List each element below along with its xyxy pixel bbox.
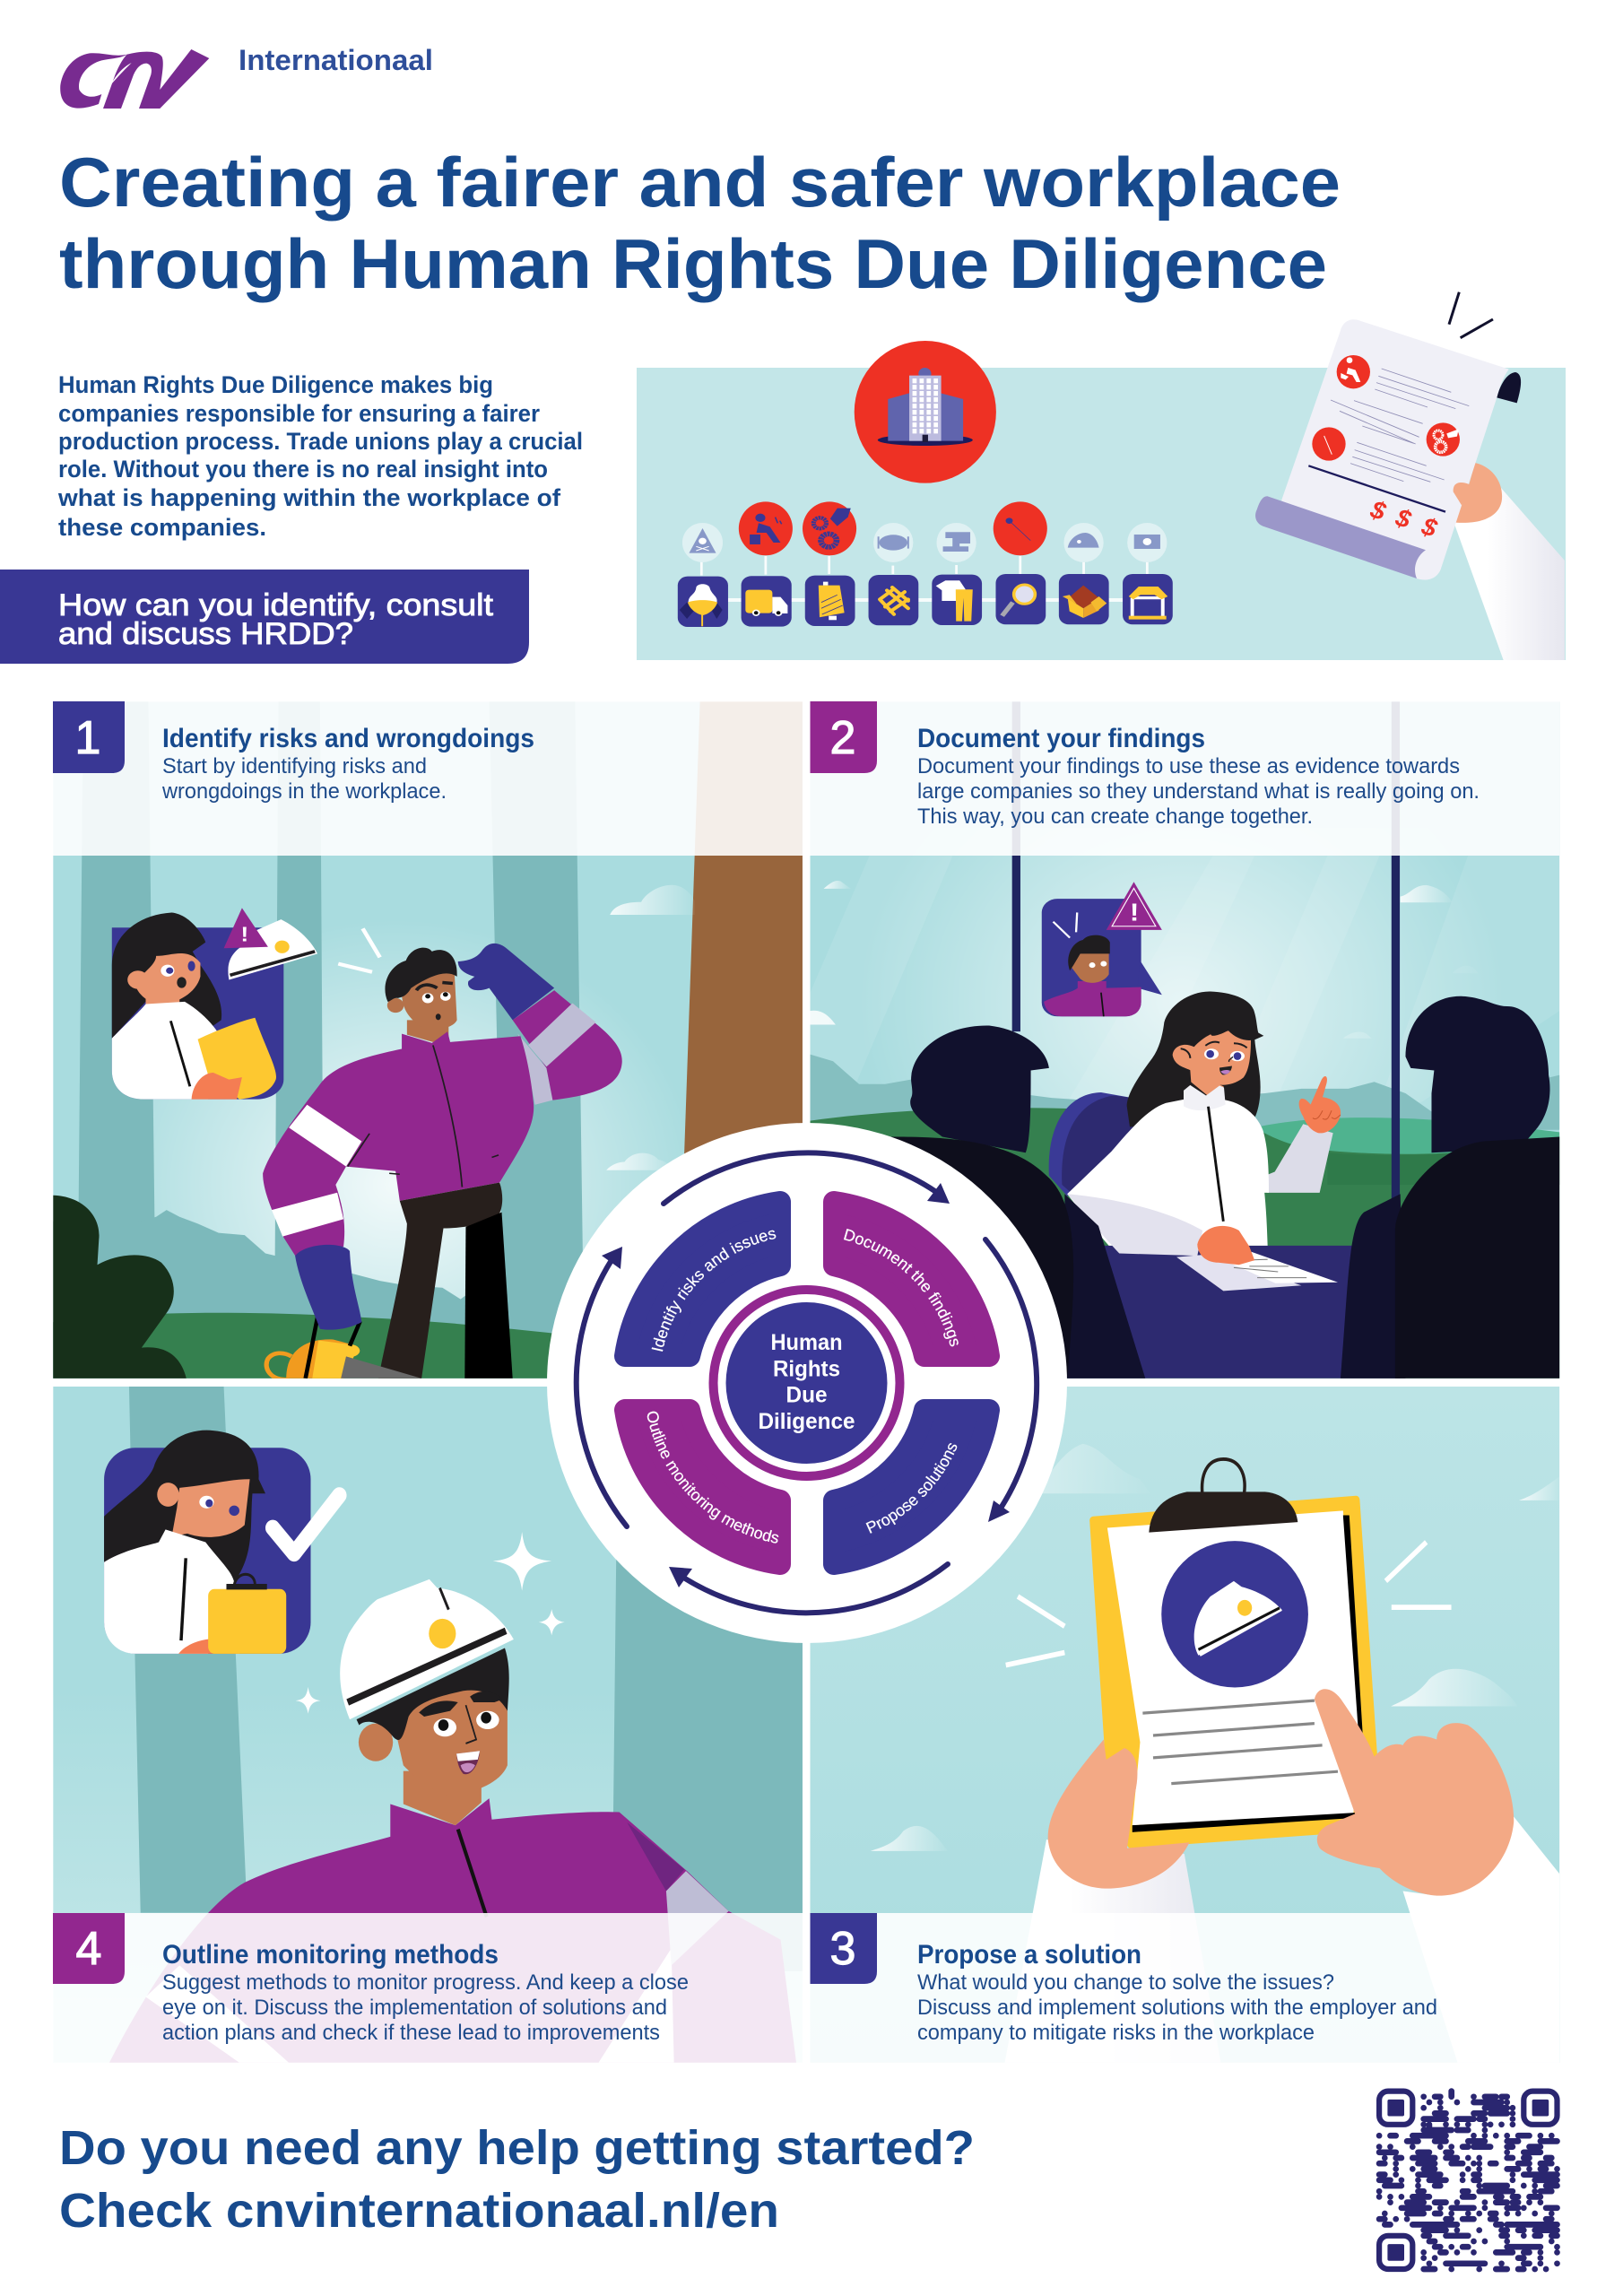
icon: cotton <box>680 584 723 626</box>
number badge 4 <box>53 1913 125 1984</box>
icon: red building circle <box>855 341 996 483</box>
logo: CNV Internationaal: Internationaal <box>239 44 433 76</box>
number badge 1 <box>53 701 125 773</box>
character: woman speaking <box>1067 992 1341 1291</box>
intro text: role. Without you there is no real insight into <box>58 456 548 483</box>
number badge 3 <box>811 1913 877 1984</box>
header overlay 4 <box>53 1913 803 2063</box>
heading: step 4: action plans and check if these lead to improvements <box>162 2021 660 2045</box>
header overlay 3 <box>811 1913 1559 2063</box>
icon: warning triangle <box>224 908 268 948</box>
segment: document <box>823 1191 1000 1367</box>
centre hub: Due <box>785 1383 828 1408</box>
segment: outline: Outline monitoring methods <box>647 1412 778 1544</box>
character: worker smiling <box>109 1579 796 2063</box>
inset: woman with clipboard <box>104 1431 339 1654</box>
rays <box>1006 1542 1452 1665</box>
centre hub: Rights <box>773 1356 840 1381</box>
speech bubble: worker <box>1042 882 1162 1016</box>
segment: outline <box>614 1399 791 1575</box>
heading: step 1: Identify risks and wrongdoings <box>162 724 534 753</box>
icon: supply chain squares <box>678 574 1173 627</box>
cloud <box>824 881 851 889</box>
sleeves <box>1005 1839 1194 2063</box>
heading: step 3 <box>917 1940 1437 2045</box>
QR code <box>1379 2092 1557 2269</box>
footer call to action: Check cnvinternationaal.nl/en <box>59 2184 779 2238</box>
icon: clothing <box>936 580 973 622</box>
heading: step 3: Propose a solution <box>917 1940 1141 1970</box>
chair <box>1049 1092 1128 1196</box>
icon: warning triangle: ! <box>240 923 248 946</box>
heading: step 3: company to mitigate risks in the workplace <box>917 2021 1315 2045</box>
centre hub <box>714 1290 900 1476</box>
heading: step 1: wrongdoings in the workplace. <box>161 779 447 804</box>
heading: step 3: Discuss and implement solutions with the employer and <box>917 1996 1437 2020</box>
segment: propose: Propose solutions <box>866 1443 958 1534</box>
icon: check mark <box>273 1495 339 1553</box>
intro text: companies responsible for ensuring a fairer <box>58 400 540 427</box>
illustration: report with hand: $ <box>1418 511 1441 543</box>
icon: yarn spool <box>819 582 845 620</box>
hands <box>1048 1689 1514 1896</box>
heading: step 3: What would you change to solve the issues? <box>917 1970 1334 1995</box>
title <box>59 143 1341 303</box>
number badge 2 <box>811 701 877 773</box>
icon: magnifier <box>1002 585 1035 616</box>
icon: helmet <box>228 919 317 979</box>
heading: step 4: Outline monitoring methods <box>162 1940 499 1970</box>
intro text: these companies. <box>58 514 266 541</box>
speech bubble: worker: ! <box>1130 899 1139 926</box>
heading: step 4: Suggest methods to monitor progress. And keep a close <box>162 1970 689 1995</box>
icon: risk bubbles <box>682 501 1167 562</box>
icon: shop <box>1129 587 1167 620</box>
number badge 2: 2 <box>830 712 855 764</box>
callout: how can you identify: and discuss HRDD? <box>58 617 353 651</box>
footer call to action <box>59 2121 975 2238</box>
icon: woven fabric <box>880 587 908 614</box>
heading: step 1 <box>161 724 534 804</box>
panel: supply chain <box>637 292 1566 660</box>
callout: how can you identify <box>0 570 529 664</box>
character: worker <box>263 928 622 1379</box>
panel 4: outline monitoring <box>53 1387 803 2063</box>
bush <box>53 1196 187 1378</box>
cycle arrows <box>577 1152 1037 1613</box>
cycle wheel <box>547 1123 1067 1643</box>
heading: step 4: eye on it. Discuss the implementation of solutions and <box>162 1996 667 2020</box>
intro text: production process. Trade unions play a crucial <box>58 428 583 455</box>
icon: box <box>1063 586 1107 618</box>
illustration: report with hand: $ <box>1367 495 1390 526</box>
header overlay 1 <box>53 701 803 856</box>
icon row: supply chain <box>678 341 1173 627</box>
segment: propose <box>823 1399 1000 1575</box>
logo: CNV Internationaal <box>60 44 433 109</box>
segment: document: Document the findings <box>843 1229 959 1347</box>
heading: step 2: This way, you can create change together. <box>917 804 1313 829</box>
table <box>1067 1246 1401 1378</box>
illustration: report with hand: $ <box>1392 503 1415 534</box>
icon: truck <box>745 590 787 616</box>
woman collar <box>1112 1085 1269 1193</box>
number badge 1: 1 <box>75 712 100 764</box>
woman head and hand <box>1127 992 1341 1193</box>
panel 3: propose a solution <box>810 1387 1559 2063</box>
intro text: what is happening within the workplace of <box>57 484 560 511</box>
heading: step 4 <box>162 1940 689 2045</box>
number badge 4: 4 <box>76 1923 101 1975</box>
heading: step 2 <box>917 724 1480 829</box>
header overlay 2 <box>811 701 1559 856</box>
icon: sparkles <box>296 1532 565 1714</box>
number badge 3: 3 <box>830 1923 855 1975</box>
title: through Human Rights Due Diligence <box>59 224 1327 303</box>
centre hub: Diligence <box>759 1409 855 1434</box>
heading: step 2: large companies so they understand what is really going on. <box>917 779 1480 804</box>
callout: how can you identify: How can you identify, consult <box>58 588 494 622</box>
intro text: Human Rights Due Diligence makes big <box>58 371 493 398</box>
clipboard <box>1093 1459 1375 1844</box>
heading: step 2: Document your findings <box>917 724 1205 753</box>
heading: step 1: Start by identifying risks and <box>162 754 427 778</box>
silhouettes <box>891 996 1560 1378</box>
heading: step 2: Document your findings to use these as evidence towards <box>917 754 1460 778</box>
panel 2: document findings <box>807 701 1559 1378</box>
segment: identify: Identify risks and issues <box>651 1231 777 1352</box>
cloud <box>610 885 695 915</box>
footer call to action: Do you need any help getting started? <box>59 2121 975 2175</box>
inset: surprised woman <box>112 908 317 1100</box>
panel 1: identify risks <box>53 701 803 1379</box>
segment: identify <box>614 1191 791 1367</box>
centre hub: Human <box>771 1330 843 1355</box>
cloud <box>1042 1444 1119 1494</box>
illustration: report with hand <box>1255 292 1565 660</box>
title: Creating a fairer and safer workplace <box>59 143 1341 222</box>
intro text <box>57 371 583 541</box>
